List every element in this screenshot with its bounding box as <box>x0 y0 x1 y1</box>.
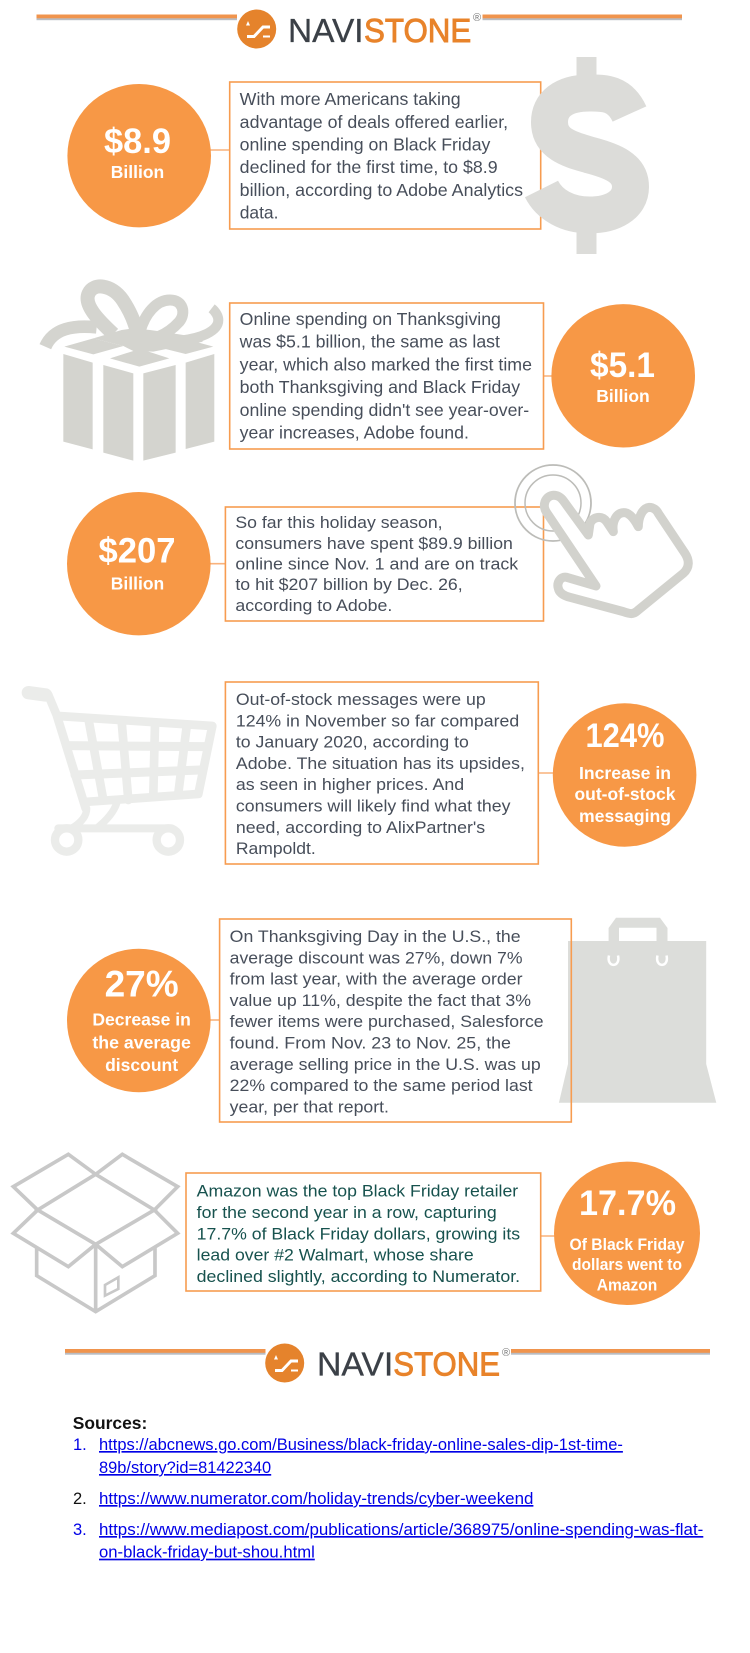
text box: average selling price in the U.S. was up <box>230 1055 541 1074</box>
stat circle: 124%: messaging <box>579 806 671 826</box>
source 3: on-black-friday-but-shou.html <box>99 1544 315 1562</box>
stat circle: $5.1 billion: Billion <box>596 386 650 406</box>
text box <box>225 507 544 621</box>
text block: billion, according to Adobe Analytics <box>240 180 523 200</box>
stat circle: $8.9 billion <box>67 84 211 227</box>
stat circle: 124%: Increase in <box>579 763 671 783</box>
stat circle: 17.7%: dollars went to <box>572 1256 682 1274</box>
icon: dollar sign <box>542 57 630 254</box>
icon: pointing hand with touch rings <box>515 465 688 614</box>
icon: open cardboard box <box>13 1154 178 1312</box>
text box frame <box>230 82 541 229</box>
stat circle: 27%: 27% <box>105 964 179 1005</box>
text box: lead over #2 Walmart, whose share <box>197 1246 474 1265</box>
text block: With more Americans taking <box>240 89 461 109</box>
text box <box>186 1173 541 1291</box>
stat circle: 124%: out-of-stock <box>574 784 676 804</box>
text box: online spending didn't see year-over- <box>240 400 529 420</box>
text box <box>225 682 538 864</box>
text box: average discount was 27%, down 7% <box>230 948 522 967</box>
text block: data. <box>240 202 278 222</box>
icon: logo mark <box>265 1344 304 1382</box>
row 6: Amazon share <box>13 1154 700 1312</box>
text box: value up 11%, despite the fact that 3% <box>230 991 531 1010</box>
text box: Out-of-stock messages were up <box>236 690 486 709</box>
stat circle: $207 billion: Billion <box>111 573 164 593</box>
text box: So far this holiday season, <box>235 513 443 532</box>
stat circle: $8.9 billion: $8.9 <box>104 122 171 161</box>
stat circle: 17.7%: Of Black Friday <box>570 1236 685 1254</box>
row 2: Thanksgiving spending <box>45 286 695 461</box>
text box: according to Adobe. <box>235 596 392 615</box>
icon: shopping cart <box>28 693 212 852</box>
sources heading: Sources: <box>73 1413 147 1433</box>
text block <box>240 89 523 222</box>
stat circle: $5.1 billion: $5.1 <box>590 346 655 385</box>
icon: gift box <box>45 286 218 461</box>
text box: 17.7% of Black Friday dollars, growing its <box>197 1224 520 1243</box>
source 2: https://www.numerator.com/holiday-trends/cyber-weekend <box>99 1490 533 1508</box>
stat circle: $8.9 billion: Billion <box>111 162 164 182</box>
text box: to January 2020, according to <box>236 733 469 752</box>
text box: Adobe. The situation has its upsides, <box>236 754 525 773</box>
source 1: https://abcnews.go.com/Business/black-friday-online-sales-dip-1st-time- <box>99 1436 623 1454</box>
stat circle: 27%: Decrease in <box>92 1010 191 1030</box>
text box: Rampoldt. <box>236 839 316 858</box>
stat circle: 17.7%: 17.7% <box>579 1184 676 1223</box>
source 1: 1. <box>73 1436 87 1454</box>
registered mark: ® <box>473 12 481 24</box>
text box: as seen in higher prices. And <box>236 775 464 794</box>
source 3: https://www.mediapost.com/publications/article/368975/online-spending-was-flat- <box>99 1521 703 1539</box>
text box: for the second year in a row, capturing <box>197 1203 497 1222</box>
stat circle: 17.7% <box>554 1162 700 1305</box>
text block: declined for the first time, to $8.9 <box>240 157 498 177</box>
logo wordmark: NAVI <box>317 1346 393 1384</box>
stat circle: 124%: 124% <box>586 717 664 755</box>
stat circle: 17.7%: Amazon <box>597 1277 657 1295</box>
stat circle: 27%: the average <box>92 1033 191 1053</box>
row 1: Black Friday spending <box>67 57 630 254</box>
source 3: 3. <box>73 1521 87 1539</box>
source 1: 89b/story?id=81422340 <box>99 1459 271 1477</box>
logo wordmark <box>288 13 471 50</box>
text box <box>230 303 543 449</box>
stat circle: 124% <box>553 703 696 847</box>
logo wordmark: STONE <box>364 13 471 50</box>
logo wordmark: STONE <box>393 1346 500 1384</box>
logo wordmark <box>317 1346 500 1384</box>
text box: year, which also marked the first time <box>240 354 532 374</box>
text box: year increases, Adobe found. <box>240 423 469 443</box>
stat circle: 27%: discount <box>105 1055 178 1075</box>
stat circle: $207 billion: $207 <box>98 532 176 571</box>
sources list <box>73 1413 703 1562</box>
text box: online since Nov. 1 and are on track <box>235 555 519 574</box>
text box: declined slightly, according to Numerator. <box>197 1267 520 1286</box>
text box: year, per that report. <box>230 1098 389 1117</box>
text box: from last year, with the average order <box>230 970 523 989</box>
text box: Online spending on Thanksgiving <box>240 309 501 329</box>
footer logo banner <box>65 1344 710 1384</box>
stat circle: 27% <box>67 949 211 1092</box>
stat circle: $5.1 billion <box>551 304 695 447</box>
text box: Amazon was the top Black Friday retailer <box>197 1182 519 1201</box>
text box: both Thanksgiving and Black Friday <box>240 377 520 397</box>
text box: to hit $207 billion by Dec. 26, <box>235 575 463 594</box>
text box: consumers have spent $89.9 billion <box>235 534 513 553</box>
source 3 <box>73 1521 703 1562</box>
text block: advantage of deals offered earlier, <box>240 112 508 132</box>
text box: was $5.1 billion, the same as last <box>239 332 500 352</box>
row 3: holiday season total <box>67 465 688 635</box>
text box: consumers will likely find what they <box>236 797 511 816</box>
icon: logo mark <box>237 10 276 48</box>
registered mark: ® <box>502 1347 510 1359</box>
text box: fewer items were purchased, Salesforce <box>230 1012 544 1031</box>
icon: shopping bag <box>559 918 716 1103</box>
text block: online spending on Black Friday <box>240 134 491 154</box>
row 4: out-of-stock messages <box>28 682 696 864</box>
text box: found. From Nov. 23 to Nov. 25, the <box>230 1034 511 1053</box>
stat circle: $207 billion <box>67 492 211 635</box>
text box: 124% in November so far compared <box>236 711 519 730</box>
source 2: 2. <box>73 1490 87 1508</box>
row 5: average discount <box>67 918 716 1122</box>
header logo banner <box>36 10 682 50</box>
text box <box>220 919 571 1122</box>
text box: need, according to AlixPartner's <box>236 818 485 837</box>
text box: On Thanksgiving Day in the U.S., the <box>230 927 521 946</box>
text box: 22% compared to the same period last <box>230 1076 533 1095</box>
logo wordmark: NAVI <box>288 13 364 50</box>
source 1 <box>73 1436 623 1477</box>
